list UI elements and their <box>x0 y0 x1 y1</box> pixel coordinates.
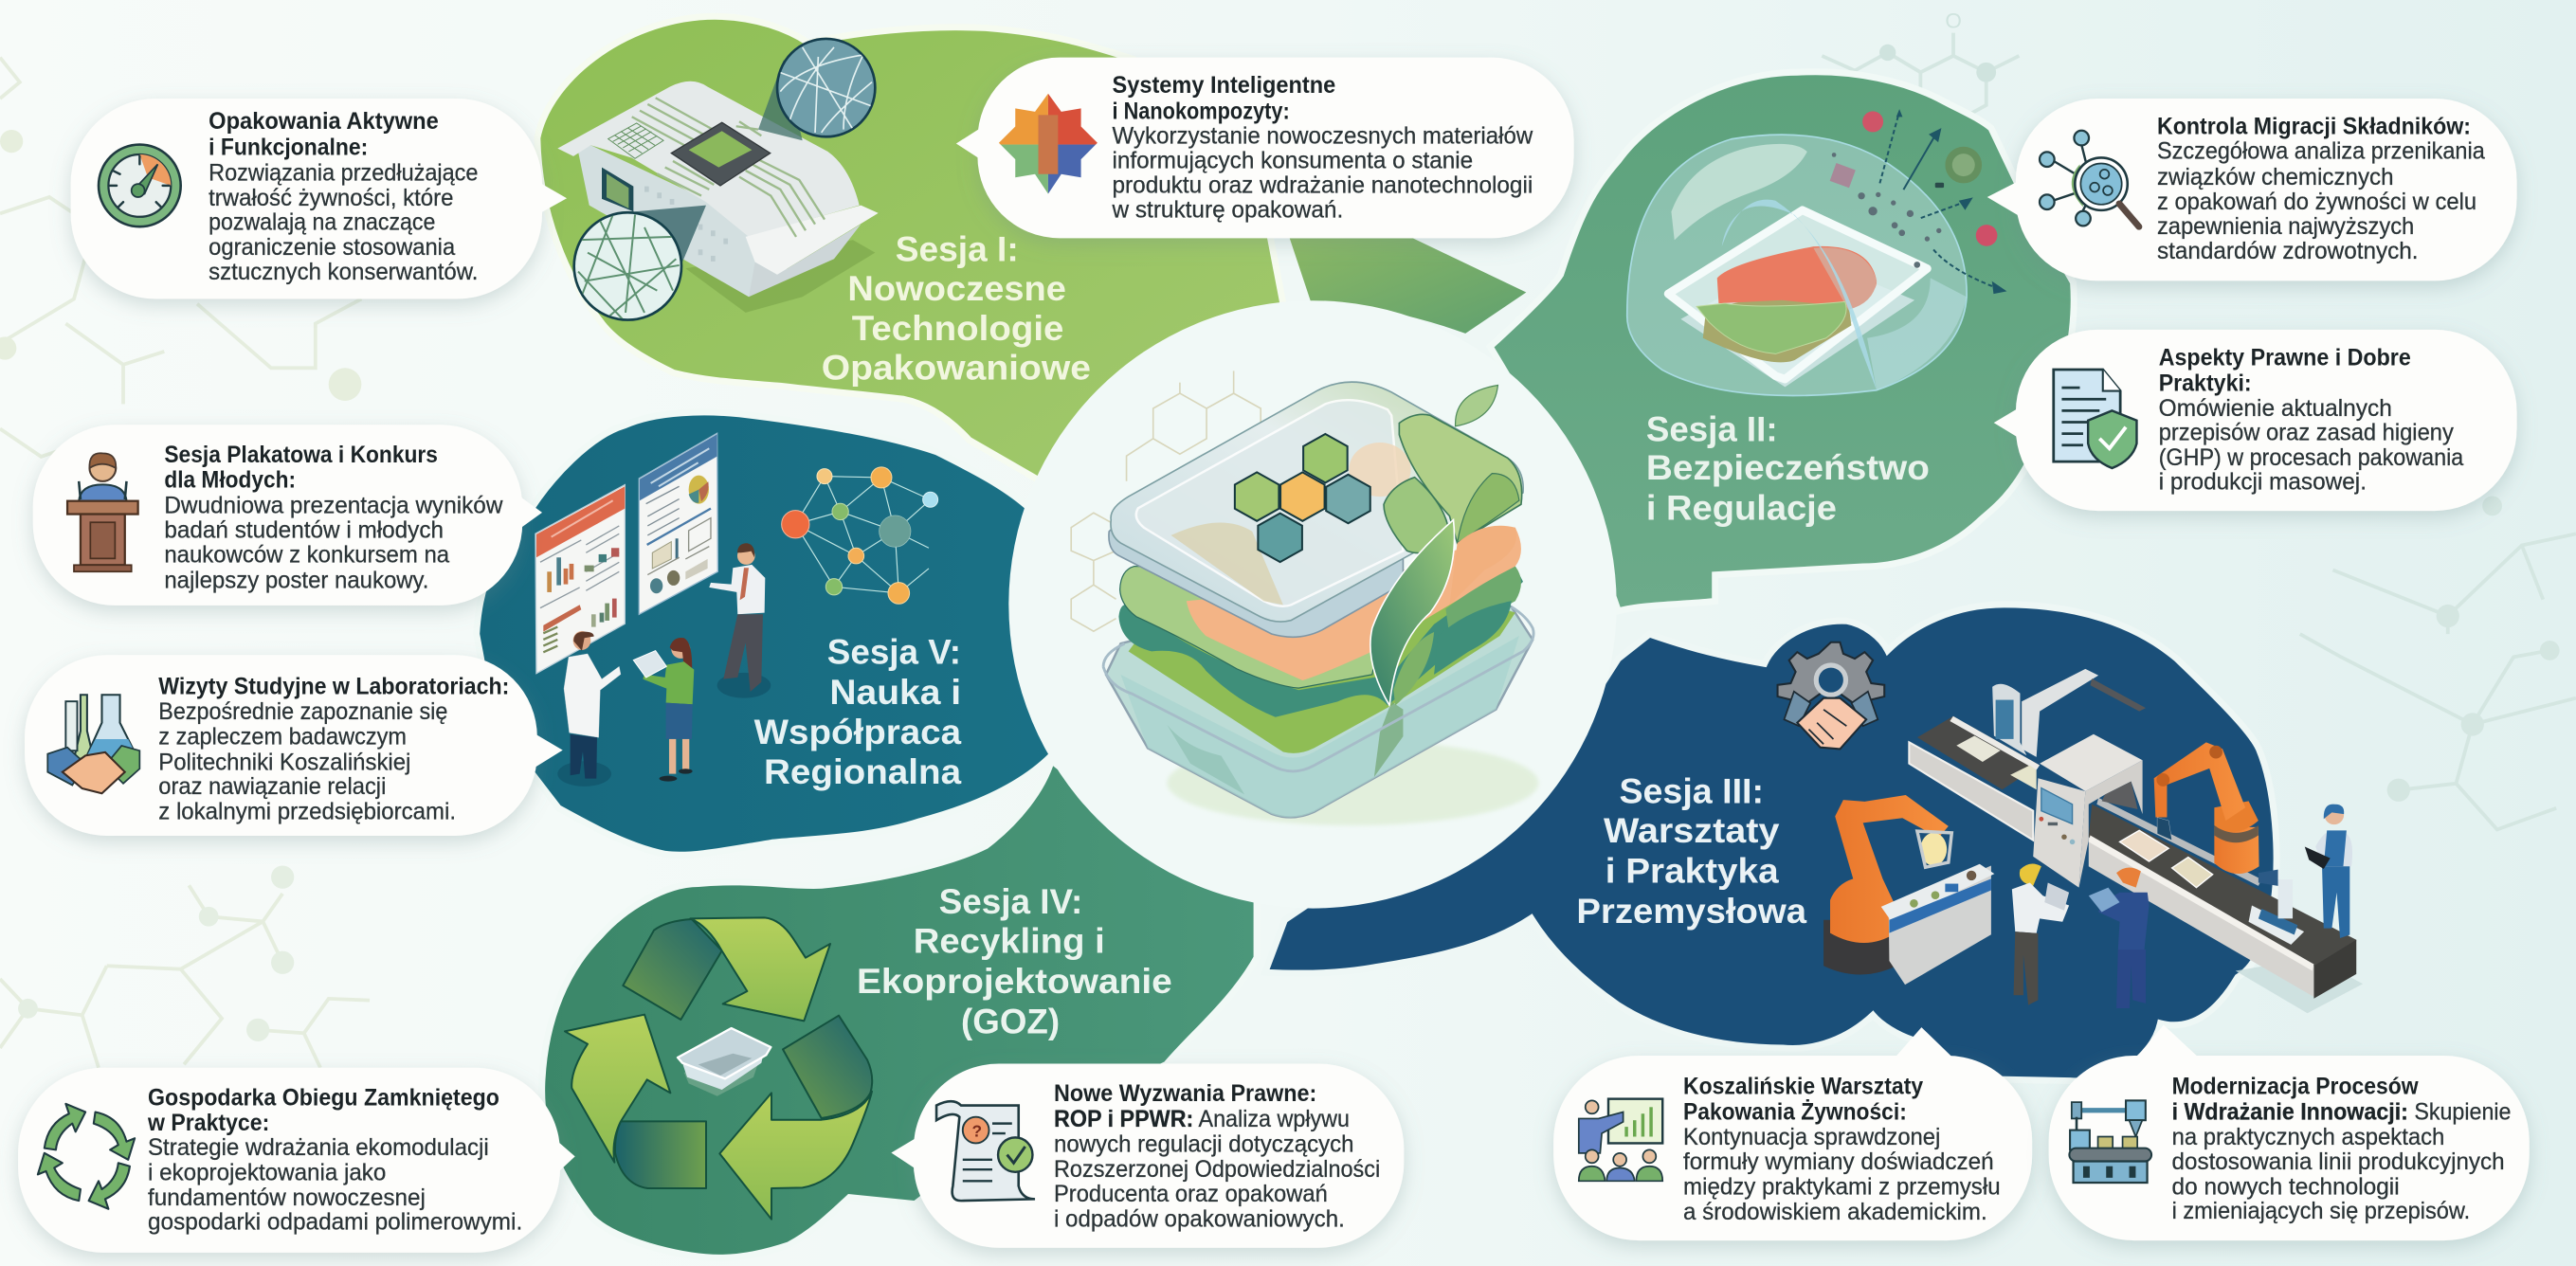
illustration: smart tray with chip <box>557 39 879 320</box>
text: Kontrola Migracji: zapewnienia najwyższych <box>2157 213 2414 240</box>
icon: legal scroll: ? <box>971 1122 982 1141</box>
text: Sesja Plakatowa: Sesja Plakatowa i Konkurs <box>164 442 438 468</box>
text: Aspekty Prawne: (GHP) w procesach pakowania <box>2159 444 2463 471</box>
callout: Wizyty Studyjne <box>25 655 563 836</box>
text: Opakowania Aktywne: trwałość żywności, które <box>209 185 453 211</box>
heading: Sesja I: Nowoczesne <box>847 268 1066 308</box>
callout: Modernizacja Procesów <box>2049 1025 2530 1240</box>
heading: Sesja II: Bezpieczeństwo <box>1646 447 1930 487</box>
text: Modernizacja Procesów: dostosowania linii produkcyjnych <box>2172 1148 2505 1175</box>
text: Wizyty Studyjne <box>158 673 509 824</box>
icon: speaker at podium <box>67 453 138 571</box>
text: Wizyty Studyjne: Politechniki Koszalińskiej <box>158 749 410 775</box>
heading: Sesja I: Opakowaniowe <box>822 347 1091 387</box>
text: Gospodarka Obiegu <box>147 1085 522 1236</box>
panel: session I blob tail <box>1290 238 1526 334</box>
text: Wizyty Studyjne: Bezpośrednie zapoznanie się <box>158 698 447 725</box>
text: Nowe Wyzwania: i odpadów opakowaniowych. <box>1054 1205 1345 1232</box>
text: Koszalińskie Warsztaty: między praktykami z przemysłu <box>1683 1174 2001 1201</box>
heading: Sesja I: Technologie <box>852 308 1063 348</box>
icon: document with shield <box>2054 370 2136 468</box>
heading: Sesja IV <box>857 881 1172 1040</box>
text: Opakowania Aktywne: Rozwiązania przedłużające <box>209 160 478 187</box>
text: Systemy Inteligentne: Systemy Inteligentne <box>1113 72 1335 99</box>
text: Aspekty Prawne: Aspekty Prawne i Dobre <box>2159 345 2411 371</box>
text: Modernizacja Procesów: na praktycznych aspektach <box>2172 1124 2444 1150</box>
text: Systemy Inteligentne: w strukturę opakowań. <box>1112 197 1343 224</box>
heading: Sesja III: i Praktyka <box>1605 851 1779 891</box>
callout: Nowe Wyzwania <box>891 1064 1404 1248</box>
text: Gospodarka Obiegu: w Praktyce: <box>147 1110 269 1136</box>
text: Koszalińskie Warsztaty: formuły wymiany doświadczeń <box>1683 1148 1994 1175</box>
text: Sesja Plakatowa: naukowców z konkursem na <box>164 542 449 569</box>
illustration: recycling symbol with tray <box>565 917 872 1220</box>
heading: Sesja I <box>822 229 1091 387</box>
text: Gospodarka Obiegu: fundamentów nowoczesnej <box>148 1185 426 1211</box>
text: Koszalińskie Warsztaty: Kontynuacja sprawdzonej <box>1683 1124 1940 1150</box>
text: Aspekty Prawne: Omówienie aktualnych <box>2159 395 2392 422</box>
illustration: posters, scientists and network <box>535 433 938 787</box>
text: Wizyty Studyjne: oraz nawiązanie relacji <box>158 773 386 800</box>
text: Opakowania Aktywne: Opakowania Aktywne <box>209 108 439 135</box>
text: Nowe Wyzwania: nowych regulacji dotyczących <box>1054 1131 1354 1158</box>
text: Modernizacja Procesów: do nowych technologii <box>2172 1174 2400 1201</box>
text: Gospodarka Obiegu: Strategie wdrażania ekomodulacji <box>148 1134 489 1161</box>
text: Systemy Inteligentne: i Nanokompozyty: <box>1113 99 1290 125</box>
text: Systemy Inteligentne: informujących konsumenta o stanie <box>1113 148 1473 174</box>
text: Nowe Wyzwania: ROP i PPWR: Analiza wpływu <box>1054 1106 1350 1132</box>
text: Kontrola Migracji: Kontrola Migracji Składników: <box>2157 113 2471 139</box>
heading: Sesja II <box>1646 408 1930 528</box>
callout: Kontrola Migracji <box>1987 99 2517 280</box>
text: Koszalińskie Warsztaty: Koszalińskie Warsztaty <box>1683 1074 1923 1100</box>
illustration: central food container <box>1071 371 1538 825</box>
panel: session II blob <box>1490 72 2074 611</box>
icon: molecule magnifier <box>2040 131 2139 226</box>
text: Modernizacja Procesów: i zmieniających się przepisów. <box>2172 1198 2470 1224</box>
text: Sesja Plakatowa <box>164 442 503 593</box>
text: Kontrola Migracji: związków chemicznych <box>2157 164 2394 190</box>
callout: Sesja Plakatowa <box>33 425 542 606</box>
text: Wizyty Studyjne: Wizyty Studyjne w Laboratoriach: <box>158 673 509 699</box>
text: Kontrola Migracji: z opakowań do żywności w celu <box>2157 189 2476 215</box>
heading: Sesja III: Przemysłowa <box>1576 891 1806 931</box>
central circle <box>1008 300 1617 909</box>
heading: Sesja III: Sesja III: <box>1619 771 1764 811</box>
text: Kontrola Migracji: standardów zdrowotnych. <box>2157 238 2419 264</box>
text: Aspekty Prawne <box>2159 345 2463 496</box>
text: Nowe Wyzwania: Rozszerzonej Odpowiedzialności <box>1054 1156 1380 1183</box>
callout: Gospodarka Obiegu <box>18 1068 575 1253</box>
text: Opakowania Aktywne: pozwalają na znaczące <box>209 209 435 236</box>
icon: flasks and handshake <box>47 695 139 793</box>
text: Aspekty Prawne: Praktyki: <box>2159 371 2252 397</box>
panel: session IV blob <box>542 761 1257 1257</box>
text: Systemy Inteligentne: Wykorzystanie nowoczesnych materiałów <box>1113 123 1533 150</box>
icon: automated machine <box>2069 1100 2151 1183</box>
icon: gauge <box>99 145 181 226</box>
text: Sesja Plakatowa: dla Młodych: <box>164 467 296 494</box>
text: Koszalińskie Warsztaty: Pakowania Żywności: <box>1683 1098 1907 1125</box>
text: Nowe Wyzwania: Nowe Wyzwania Prawne: <box>1054 1080 1316 1107</box>
text: Kontrola Migracji: Szczegółowa analiza przenikania <box>2157 137 2485 164</box>
text: Wizyty Studyjne: z lokalnymi przedsiębiorcami. <box>158 798 456 824</box>
icon: circular arrows <box>38 1104 135 1209</box>
heading: Sesja IV: (GOZ) <box>961 1001 1060 1040</box>
icon: multicolour star <box>999 93 1098 193</box>
text: Gospodarka Obiegu: gospodarki odpadami polimerowymi. <box>148 1209 522 1236</box>
heading: Sesja IV: Ekoprojektowanie <box>857 961 1172 1001</box>
text: Koszalińskie Warsztaty <box>1683 1074 2001 1225</box>
callout: Systemy Inteligentne <box>956 58 1574 238</box>
callout: Opakowania Aktywne <box>71 99 567 298</box>
text: Koszalińskie Warsztaty: a środowiskiem akademickim. <box>1683 1199 1987 1225</box>
panel: session I blob <box>537 16 1285 493</box>
heading: Sesja V: Współpraca <box>754 712 961 751</box>
illustration: production line <box>1909 669 2363 1013</box>
text: O <box>1945 9 1962 32</box>
text: Modernizacja Procesów: i Wdrażanie Innowacji: Skupienie <box>2172 1098 2512 1125</box>
icon: legal scroll <box>936 1101 1035 1201</box>
illustration: protective dome over food tray <box>1627 109 2006 396</box>
background molecules <box>0 58 370 1068</box>
heading: Sesja IV: Sesja IV: <box>939 881 1082 921</box>
text: Sesja Plakatowa: Dwudniowa prezentacja wyników <box>164 493 503 519</box>
text: Aspekty Prawne: przepisów oraz zasad higieny <box>2159 420 2454 446</box>
text: Wizyty Studyjne: z zapleczem badawczym <box>158 724 407 751</box>
icon: presenter and audience <box>1579 1099 1662 1181</box>
heading: Sesja II: Sesja II: <box>1646 408 1778 448</box>
text: Opakowania Aktywne: i Funkcjonalne: <box>209 135 368 161</box>
icon: gear and handshake <box>1778 642 1884 749</box>
heading: Sesja V: Regionalna <box>764 751 961 791</box>
text: Sesja Plakatowa: badań studentów i młodych <box>164 517 444 544</box>
heading: Sesja V: Nauka i <box>829 672 961 712</box>
text: Gospodarka Obiegu: i ekoprojektowania jako <box>148 1160 386 1186</box>
heading: Sesja V: Sesja V: <box>827 631 961 671</box>
heading: Sesja III <box>1576 771 1806 931</box>
panel: session V blob <box>477 412 1150 855</box>
text: Modernizacja Procesów <box>2172 1074 2512 1224</box>
text: Opakowania Aktywne: ograniczenie stosowania <box>209 234 455 261</box>
text: Nowe Wyzwania <box>1054 1080 1380 1232</box>
text: Sesja Plakatowa: najlepszy poster naukowy. <box>164 567 428 593</box>
text: Modernizacja Procesów: Modernizacja Procesów <box>2172 1074 2419 1100</box>
text: Nowe Wyzwania: Producenta oraz opakowań <box>1054 1181 1328 1207</box>
heading: Sesja III: Warsztaty <box>1604 810 1780 850</box>
text: Opakowania Aktywne <box>209 108 478 285</box>
text: Systemy Inteligentne: produktu oraz wdrażanie nanotechnologii <box>1113 172 1533 199</box>
text: Gospodarka Obiegu: Gospodarka Obiegu Zamkniętego <box>148 1085 499 1112</box>
heading: Sesja II: i Regulacje <box>1646 488 1837 528</box>
text: Systemy Inteligentne <box>1112 72 1533 224</box>
panel: session III blob <box>1265 605 2277 1081</box>
illustration: robot arm and control table <box>1823 795 1994 985</box>
text: Aspekty Prawne: i produkcji masowej. <box>2159 469 2367 496</box>
text: Kontrola Migracji <box>2157 113 2485 264</box>
text: Opakowania Aktywne: sztucznych konserwantów. <box>209 259 478 285</box>
heading: Sesja IV: Recykling i <box>914 920 1105 960</box>
heading: Sesja V <box>754 631 961 791</box>
callout: Koszalińskie Warsztaty <box>1553 1027 2032 1240</box>
heading: Sesja I: Sesja I: <box>896 229 1019 269</box>
callout: Aspekty Prawne <box>1994 330 2517 511</box>
